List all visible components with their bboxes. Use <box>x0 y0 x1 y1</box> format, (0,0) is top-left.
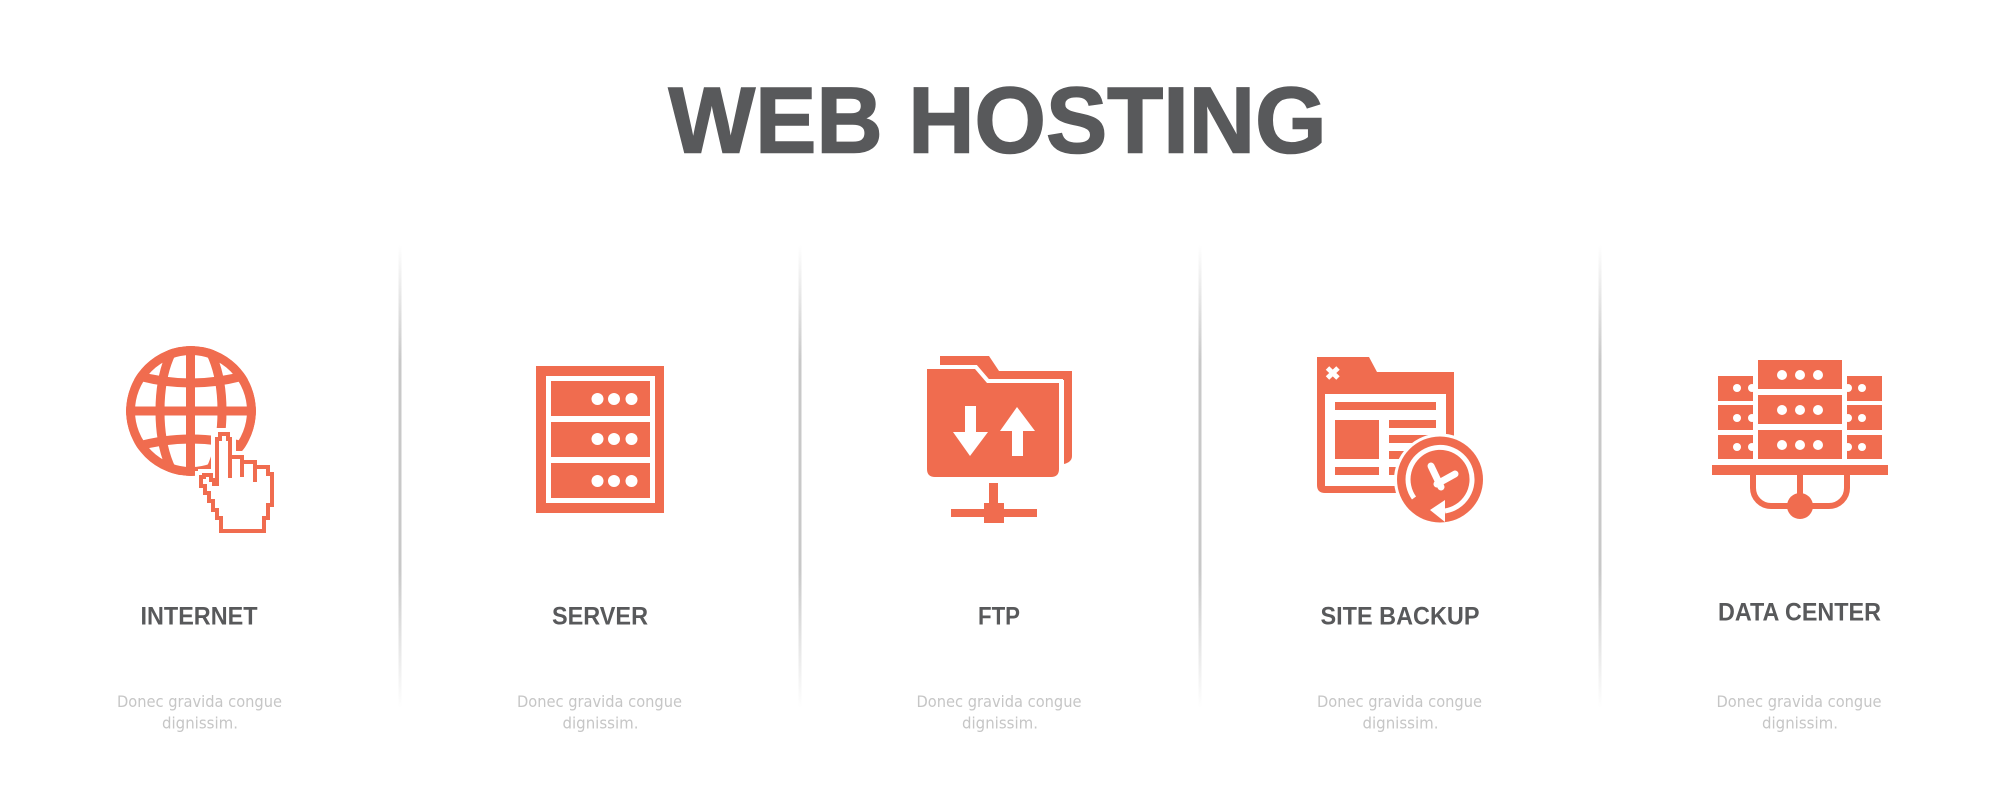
heading: internet: INTERNET <box>140 602 258 630</box>
text: ftp description: Donec gravida congue <box>916 692 1082 711</box>
heading: ftp: FTP <box>978 602 1020 630</box>
text: ftp description <box>916 692 1082 732</box>
panel: server <box>517 366 682 732</box>
panel: site backup <box>1317 357 1483 732</box>
heading: data center: DATA CENTER <box>1718 598 1881 626</box>
text: data center description: dignissim. <box>1762 714 1838 732</box>
text: site backup description: dignissim. <box>1362 714 1438 732</box>
icon: ftp folder with arrows and network <box>927 356 1072 523</box>
icon: site window with backup clock <box>1317 357 1483 522</box>
text: internet description: Donec gravida congue <box>117 692 282 711</box>
text: internet description: dignissim. <box>162 714 238 732</box>
text: server description: dignissim. <box>562 714 638 732</box>
icon: server rack <box>536 366 664 513</box>
infographic: web hosting <box>118 86 1888 732</box>
heading: site backup: SITE BACKUP <box>1320 602 1480 630</box>
panel: ftp <box>916 356 1082 732</box>
icon: globe with pointing hand <box>120 336 272 531</box>
icon: data center servers <box>1712 360 1888 519</box>
panel: data center <box>1712 360 1888 732</box>
text: server description <box>517 692 682 732</box>
text: data center description <box>1716 692 1882 732</box>
text: ftp description: dignissim. <box>962 714 1038 732</box>
text: site backup description <box>1317 692 1482 732</box>
title: WEB HOSTING <box>668 68 1326 172</box>
text: server description: Donec gravida congue <box>517 692 682 711</box>
text: data center description: Donec gravida congue <box>1716 692 1882 711</box>
text: internet description <box>117 692 282 732</box>
heading: server: SERVER <box>552 602 648 630</box>
panel: internet <box>117 336 282 732</box>
text: site backup description: Donec gravida congue <box>1317 692 1482 711</box>
